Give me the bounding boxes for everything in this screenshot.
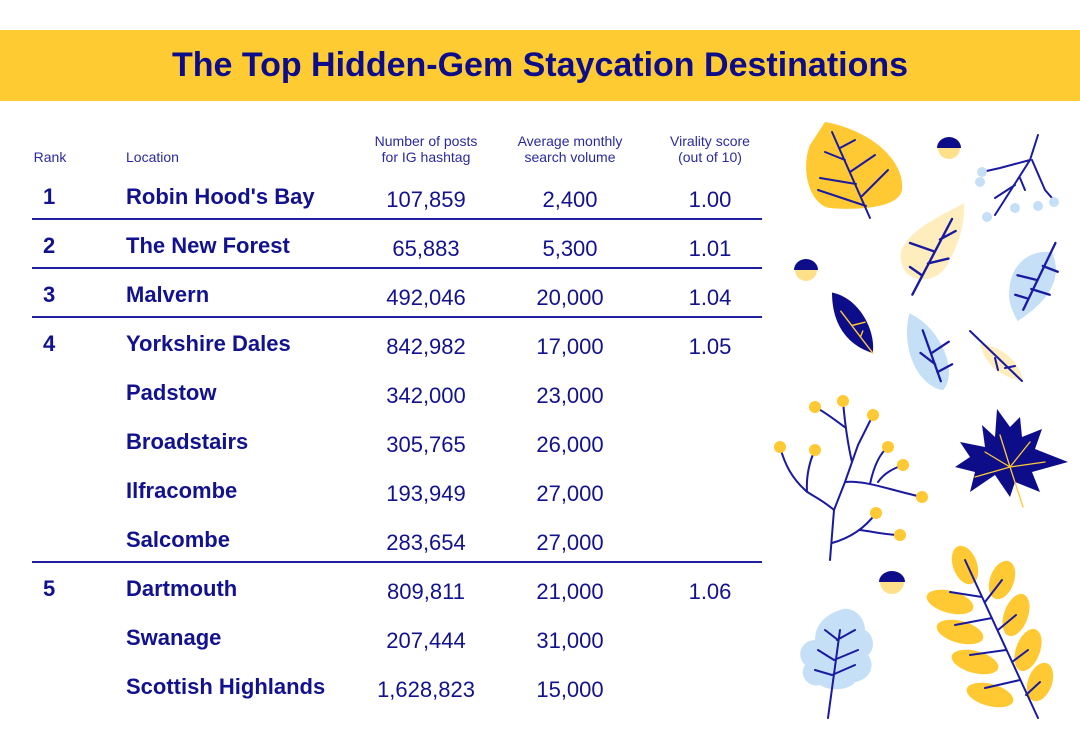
- header: virality: Virality score: [670, 133, 750, 149]
- row 1: 2,400: [542, 187, 598, 212]
- row Salcombe: Salcombe: [126, 527, 230, 552]
- row 3: 1.04: [689, 285, 731, 310]
- row 3: 3: [43, 282, 55, 307]
- row Swanage: 31,000: [536, 628, 604, 653]
- table rows: [43, 184, 731, 702]
- row 5: [43, 576, 731, 604]
- icon: yellow fern leaf: [924, 542, 1058, 718]
- row Broadstairs: [126, 429, 604, 457]
- header: posts: for IG hashtag: [382, 149, 470, 165]
- icon: big yellow leaf: [806, 122, 902, 218]
- icon: cream leaf: [900, 203, 964, 295]
- icon: cream leaf small: [970, 331, 1023, 381]
- row Padstow: [126, 380, 604, 408]
- title: The Top Hidden-Gem Staycation Destinations: [172, 46, 908, 84]
- row Ilfracombe: [126, 478, 604, 506]
- row 5: 21,000: [536, 579, 604, 604]
- row Scottish Highlands: Scottish Highlands: [126, 674, 325, 699]
- row 4: [43, 331, 731, 359]
- row 2: [43, 233, 731, 261]
- icon: acorn 3: [879, 571, 905, 594]
- header: posts: Number of posts: [375, 133, 477, 149]
- icon: blue leaf middle: [907, 313, 952, 390]
- row 3: Malvern: [126, 282, 209, 307]
- icon: blue berry branch: [975, 135, 1059, 222]
- header: search: Average monthly: [518, 133, 622, 149]
- row 4: 1.05: [689, 334, 731, 359]
- row 2: 65,883: [392, 236, 460, 261]
- icon: acorn 1: [937, 137, 961, 159]
- row 4: Yorkshire Dales: [126, 331, 291, 356]
- header: rank: Rank: [34, 149, 66, 165]
- header: virality: (out of 10): [678, 149, 742, 165]
- row 4: 842,982: [386, 334, 466, 359]
- row Ilfracombe: Ilfracombe: [126, 478, 237, 503]
- row Scottish Highlands: 1,628,823: [377, 677, 475, 702]
- row 3: [43, 282, 731, 310]
- row 4: 4: [43, 331, 55, 356]
- row Broadstairs: 305,765: [386, 432, 466, 457]
- icon: navy maple leaf: [955, 409, 1068, 507]
- row 1: 107,859: [386, 187, 466, 212]
- row Swanage: 207,444: [386, 628, 466, 653]
- row 4: 17,000: [536, 334, 604, 359]
- icon: acorn 2: [794, 259, 818, 281]
- row Padstow: Padstow: [126, 380, 216, 405]
- icon: light blue leaf right: [1009, 243, 1058, 321]
- leaves illustration: [774, 122, 1068, 719]
- header: posts: [375, 133, 477, 165]
- icon: navy leaf: [832, 292, 873, 353]
- header: location: Location: [126, 149, 179, 165]
- row 2: 2: [43, 233, 55, 258]
- row 2: The New Forest: [126, 233, 290, 258]
- row Swanage: Swanage: [126, 625, 221, 650]
- header: virality: [670, 133, 750, 165]
- row 1: 1: [43, 184, 55, 209]
- row 1: 1.00: [689, 187, 731, 212]
- row Salcombe: [126, 527, 604, 555]
- row Broadstairs: 26,000: [536, 432, 604, 457]
- row 5: 5: [43, 576, 55, 601]
- row Broadstairs: Broadstairs: [126, 429, 248, 454]
- header: search: [518, 133, 622, 165]
- row 5: 809,811: [387, 579, 465, 604]
- row 5: Dartmouth: [126, 576, 237, 601]
- row 2: 1.01: [689, 236, 731, 261]
- banner: [0, 30, 1080, 101]
- row Scottish Highlands: 15,000: [536, 677, 604, 702]
- row Ilfracombe: 193,949: [386, 481, 466, 506]
- row Padstow: 23,000: [536, 383, 604, 408]
- row 3: 492,046: [386, 285, 466, 310]
- row Swanage: [126, 625, 604, 653]
- row Padstow: 342,000: [386, 383, 466, 408]
- row Salcombe: 27,000: [536, 530, 604, 555]
- header: search: search volume: [524, 149, 616, 165]
- row Scottish Highlands: [126, 674, 604, 702]
- row 5: 1.06: [689, 579, 731, 604]
- row 1: Robin Hood's Bay: [126, 184, 315, 209]
- row 1: [43, 184, 731, 212]
- icon: light blue oak leaf: [800, 609, 873, 718]
- row 2: 5,300: [542, 236, 598, 261]
- row Ilfracombe: 27,000: [536, 481, 604, 506]
- row 3: 20,000: [536, 285, 604, 310]
- icon: yellow berry branch: [774, 395, 928, 560]
- row Salcombe: 283,654: [386, 530, 466, 555]
